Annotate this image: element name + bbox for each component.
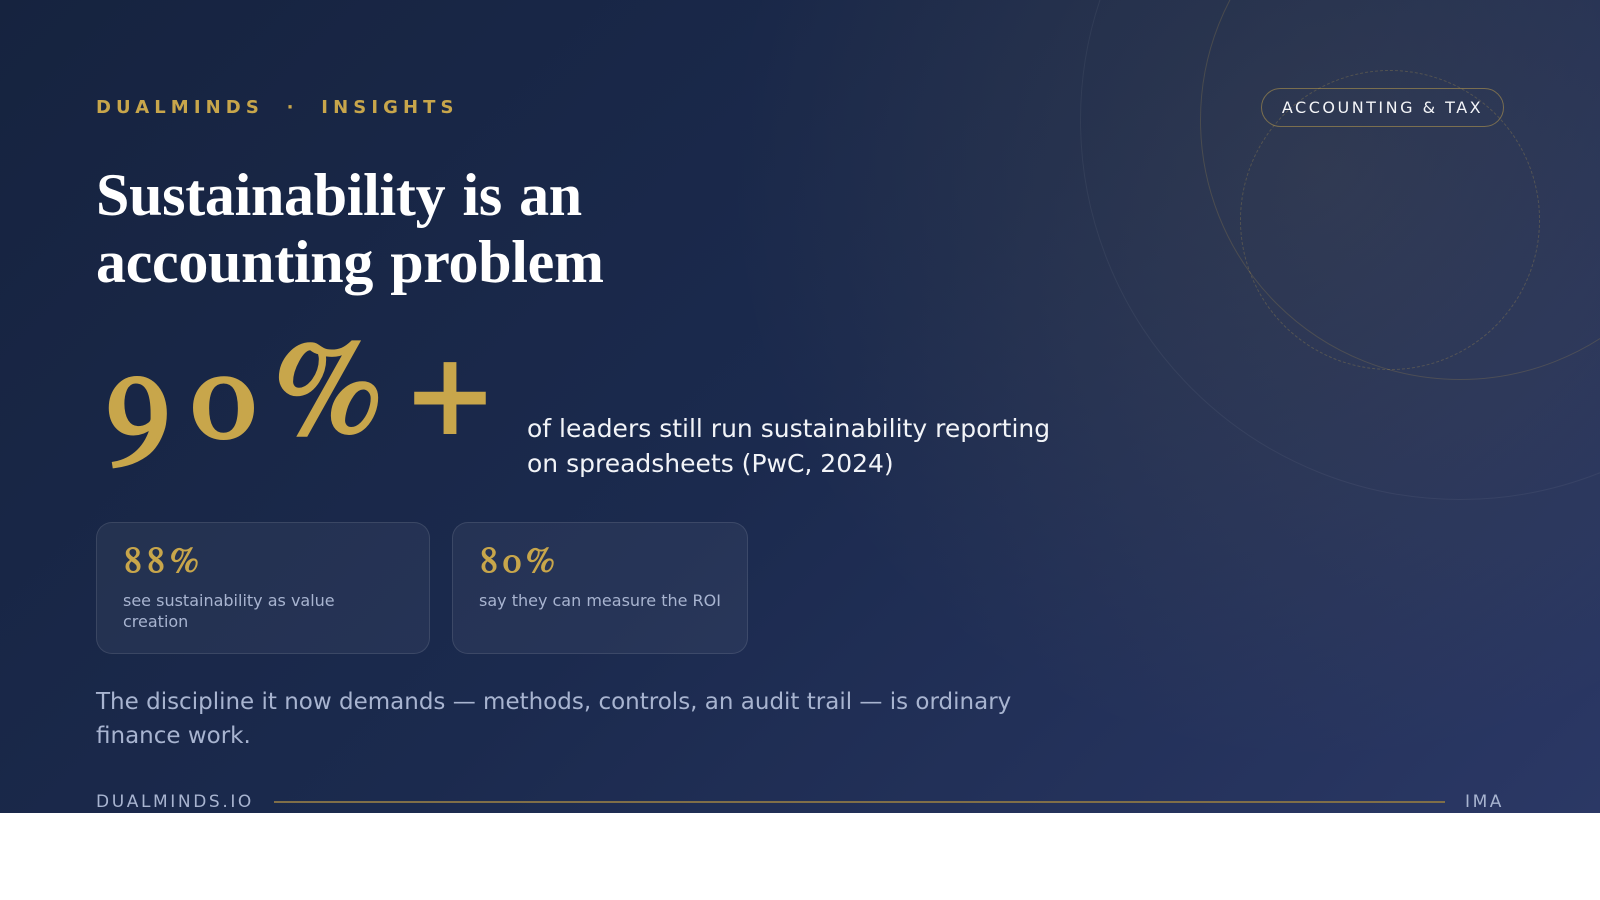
stat label <box>123 591 335 631</box>
closing statement: The discipline it now demands — methods, controls, an audit trail — is ordinary <box>96 689 1011 715</box>
footer rule <box>274 801 1445 803</box>
closing statement <box>96 689 1011 749</box>
stat label: say they can measure the ROI <box>479 591 721 610</box>
footer brand: DUALMINDS.IO <box>96 792 254 812</box>
headline statistic: 90%+ <box>107 325 488 462</box>
headline statistic description: of leaders still run sustainability reporting <box>527 414 1050 443</box>
stat label: see sustainability as value <box>123 591 335 610</box>
title: accounting problem <box>96 229 604 295</box>
headline statistic description: on spreadsheets (PwC, 2024) <box>527 449 894 478</box>
stat label: creation <box>123 612 188 631</box>
stat card: 80% <box>452 522 748 654</box>
category pill: ACCOUNTING & TAX <box>1282 98 1483 117</box>
category pill <box>1261 88 1504 127</box>
decorative outer ring <box>1080 0 1600 500</box>
eyebrow: DUALMINDS · INSIGHTS <box>96 97 459 118</box>
footer source: IMA <box>1465 792 1504 812</box>
title <box>96 162 604 296</box>
headline statistic description <box>527 414 1050 478</box>
stat value 80%: 80% <box>480 544 560 580</box>
title: Sustainability is an <box>96 162 582 228</box>
closing statement: finance work. <box>96 723 251 749</box>
stat card: 88% <box>96 522 430 654</box>
stat value 88%: 88% <box>124 544 204 580</box>
decorative middle ring <box>1200 0 1600 380</box>
background glow <box>720 0 1600 770</box>
decorative dashed ring <box>1240 70 1540 370</box>
